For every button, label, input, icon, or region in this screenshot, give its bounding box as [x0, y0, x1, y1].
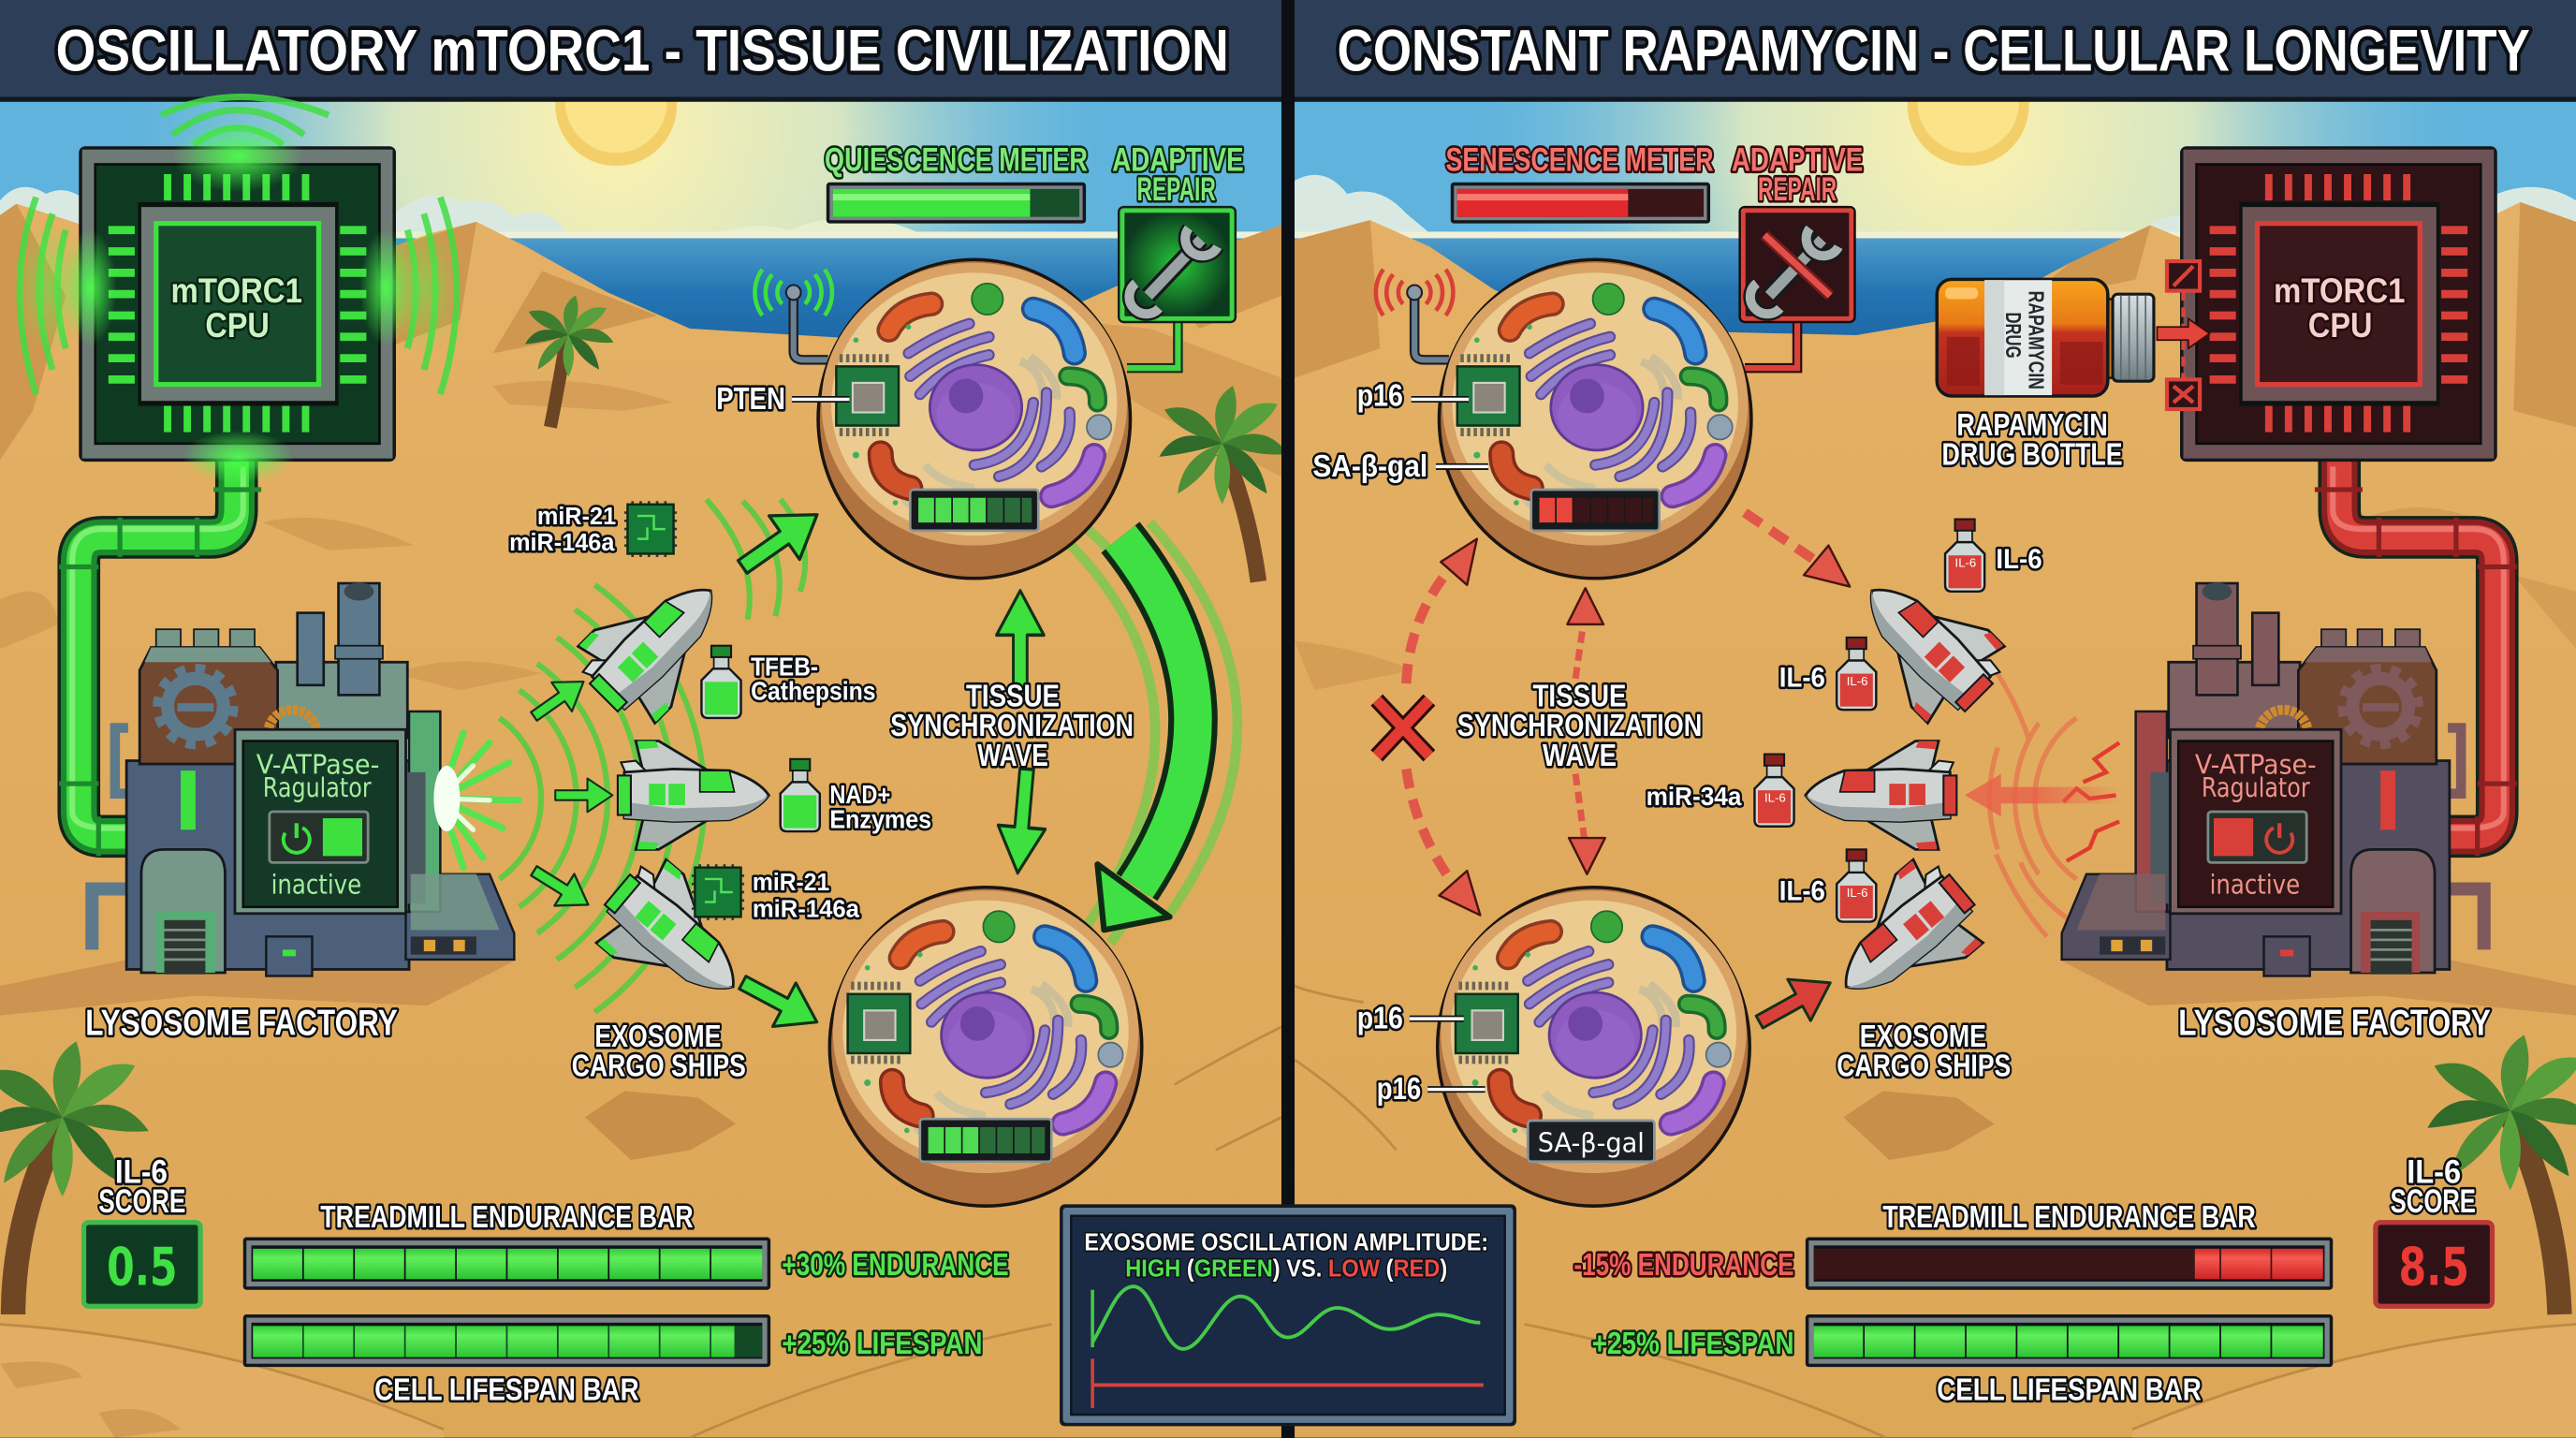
label: tissue synchronization wave right: SYNCHRONIZATION	[1457, 709, 1702, 743]
broken link X mark	[1377, 700, 1429, 756]
lysosome factory: red: Ragulator	[2202, 772, 2310, 803]
callout: SA-beta-gal top: SA-β-gal	[1312, 449, 1427, 484]
callout: p16 top	[1357, 378, 1469, 413]
label: tissue synchronization wave left	[890, 680, 1134, 773]
label: lysosome factory right: LYSOSOME FACTORY	[2178, 1004, 2491, 1044]
vial: IL-6 top: IL-6	[1955, 555, 1976, 569]
label: exosome ships left: EXOSOME	[594, 1020, 721, 1054]
label: exosome ships left	[572, 1020, 746, 1084]
exosome wave arcs: green	[500, 500, 805, 1012]
mTORC1 CPU: red: mTORC1	[2274, 271, 2405, 310]
arrows: green exosome flow	[524, 492, 1050, 1044]
palm tree: left near sea	[1159, 386, 1288, 581]
vial: miR-34a: miR-34a	[1647, 782, 1742, 811]
quiescence meter	[825, 142, 1088, 224]
connector: adaptive repair red	[1745, 318, 1797, 368]
pipe: red	[2315, 460, 2517, 856]
callout: p16 lower one	[1357, 1002, 1464, 1036]
cell: bottom right	[1436, 886, 1751, 1208]
IL-6 score: green: 0.5	[107, 1237, 178, 1298]
exosome wave arcs: red	[1980, 649, 2076, 936]
vial: IL-6 top	[1945, 520, 2042, 592]
vial: TFEB-Cathepsins	[701, 646, 875, 718]
panel: exosome oscillation amplitude	[1060, 1204, 1516, 1426]
bar: cell lifespan left: +25% LIFESPAN	[782, 1327, 983, 1361]
callout: PTEN: PTEN	[716, 382, 785, 417]
mTORC1 CPU: green: mTORC1	[171, 271, 302, 310]
lysosome factory: green	[92, 582, 514, 976]
cell: bottom left	[828, 886, 1144, 1208]
IL-6 score: green	[84, 1154, 200, 1306]
panel: exosome oscillation amplitude: HIGH (GREEN) VS. LOW (RED)	[1125, 1255, 1447, 1283]
mTORC1 CPU: green	[64, 120, 413, 483]
pipe: green	[59, 460, 261, 856]
vial: NAD+ Enzymes	[781, 759, 931, 834]
IL-6 score: green: IL-6	[115, 1154, 168, 1191]
bottle inhibition arrow and blocks	[2157, 261, 2210, 409]
vial: miR-34a: IL-6	[1764, 790, 1786, 804]
palm tree: left mid dune	[525, 296, 614, 427]
senescence meter: SENESCENCE METER	[1445, 142, 1714, 179]
bar: treadmill endurance left: +30% ENDURANCE	[782, 1248, 1009, 1283]
cell: bottom right: SA-β-gal	[1538, 1127, 1645, 1158]
callout: p16 top: p16	[1357, 378, 1403, 413]
panel: exosome oscillation amplitude: EXOSOME OSCILLATION AMPLITUDE:	[1084, 1228, 1488, 1256]
vial: IL-6 third: IL-6	[1847, 886, 1867, 900]
chip cargo: top left: miR-146a	[509, 528, 615, 556]
vial: IL-6 top: IL-6	[1996, 544, 2042, 575]
mTORC1 CPU: red: CPU	[2308, 306, 2372, 345]
palm tree: bottom right	[2427, 1034, 2576, 1314]
signal waves around green CPU	[13, 97, 460, 394]
lysosome factory: green: V-ATPase-	[256, 750, 379, 781]
quiescence meter: QUIESCENCE METER	[825, 142, 1088, 179]
bar: treadmill endurance right	[1573, 1200, 2333, 1290]
connector line bright: red	[1745, 318, 1797, 368]
cell: top right	[1438, 258, 1753, 580]
connector line bright: green	[1127, 318, 1178, 368]
mTORC1 CPU: red	[2180, 146, 2497, 462]
vial: IL-6 third	[1779, 849, 1876, 922]
label: tissue synchronization wave left: WAVE	[977, 739, 1048, 773]
label: tissue synchronization wave right: TISSUE	[1533, 680, 1627, 714]
rapamycin drug bottle: RAPAMYCIN	[2025, 291, 2049, 389]
label: rapamycin drug bottle	[1942, 408, 2123, 473]
vial: NAD+ Enzymes: Enzymes	[829, 805, 931, 834]
rapamycin drug bottle: DRUG	[2001, 312, 2026, 359]
label: tissue synchronization wave right: WAVE	[1543, 739, 1617, 773]
bar: treadmill endurance left: TREADMILL ENDURANCE BAR	[320, 1200, 694, 1235]
lysosome factory: red	[2062, 582, 2484, 976]
label: tissue synchronization wave right	[1457, 680, 1702, 773]
curved synchronization arrow	[1064, 522, 1237, 943]
vial: TFEB-Cathepsins: TFEB-	[751, 652, 818, 681]
background: left desert scene	[0, 44, 1281, 1438]
energy spark	[433, 733, 520, 868]
adaptive repair: green: REPAIR	[1137, 171, 1216, 208]
header bar: left	[0, 0, 1281, 98]
chip cargo: lower left: miR-21	[753, 868, 829, 896]
label: tissue synchronization wave left: TISSUE	[966, 680, 1060, 714]
lysosome factory: red: inactive	[2210, 870, 2300, 901]
antenna: red	[1376, 270, 1453, 360]
ship: middle left	[618, 741, 768, 849]
palm tree: bottom left	[0, 1041, 149, 1314]
label: exosome ships right: CARGO SHIPS	[1837, 1049, 2011, 1084]
ship: top right	[1834, 552, 2017, 736]
connector: adaptive repair green	[1127, 318, 1178, 368]
mTORC1 CPU: green: CPU	[205, 306, 270, 345]
label: tissue synchronization wave left: SYNCHRONIZATION	[890, 709, 1134, 743]
title: left: OSCILLATORY mTORC1 - TISSUE CIVILIZATION	[56, 18, 1229, 83]
IL-6 score: red	[2376, 1154, 2492, 1306]
ship: middle right	[1806, 741, 1956, 849]
IL-6 score: green: SCORE	[98, 1183, 185, 1220]
chip cargo: lower left: miR-146a	[753, 894, 859, 922]
callout: p16 lower one: p16	[1357, 1002, 1403, 1036]
label: exosome ships left: CARGO SHIPS	[572, 1049, 746, 1084]
vial: TFEB-Cathepsins: Cathepsins	[751, 677, 875, 706]
bar: cell lifespan right: +25% LIFESPAN	[1592, 1327, 1794, 1361]
chip cargo: top left	[509, 501, 677, 557]
red electric cracks	[2063, 742, 2119, 861]
bar: cell lifespan left: CELL LIFESPAN BAR	[374, 1372, 639, 1407]
dashed broken arrows: red	[1406, 513, 1850, 916]
label: rapamycin drug bottle: RAPAMYCIN	[1956, 408, 2108, 443]
lysosome factory: green: Ragulator	[263, 772, 372, 803]
adaptive repair: disabled red	[1732, 142, 1863, 322]
antenna: green	[754, 270, 832, 360]
adaptive repair: green: ADAPTIVE	[1112, 142, 1244, 179]
rapamycin drug bottle	[1937, 279, 2154, 396]
arrow: red to exosome ship	[1748, 962, 1841, 1043]
cell: top left	[816, 258, 1132, 580]
bar: treadmill endurance right: -15% ENDURANCE	[1573, 1248, 1794, 1283]
bar: treadmill endurance right: TREADMILL ENDURANCE BAR	[1882, 1200, 2256, 1235]
lysosome factory: green: inactive	[271, 870, 361, 901]
vial: NAD+ Enzymes: NAD+	[829, 780, 890, 809]
callout: p16 lower two	[1377, 1072, 1486, 1107]
adaptive repair: green	[1112, 142, 1244, 322]
vial: IL-6 third: IL-6	[1779, 876, 1825, 907]
adaptive repair: disabled red: REPAIR	[1758, 171, 1837, 208]
lysosome factory: red: V-ATPase-	[2195, 750, 2317, 781]
vial: miR-34a	[1647, 755, 1794, 827]
IL-6 score: red: 8.5	[2398, 1237, 2469, 1298]
bar: cell lifespan right: CELL LIFESPAN BAR	[1937, 1372, 2202, 1407]
chip cargo: lower left	[692, 864, 859, 922]
ship: lower left	[582, 848, 768, 1028]
header bar: right	[1295, 0, 2576, 98]
IL-6 score: red: IL-6	[2407, 1154, 2461, 1191]
label: exosome ships right	[1837, 1020, 2011, 1084]
vial: IL-6 second	[1779, 638, 1876, 710]
bar: cell lifespan right	[1592, 1314, 2333, 1407]
vial: IL-6 second: IL-6	[1779, 663, 1825, 694]
adaptive repair: disabled red: ADAPTIVE	[1732, 142, 1863, 179]
centre divider	[1281, 0, 1295, 1438]
label: exosome ships right: EXOSOME	[1860, 1020, 1986, 1054]
ship: lower right	[1811, 848, 1997, 1028]
chip cargo: top left: miR-21	[537, 502, 616, 530]
vial: IL-6 second: IL-6	[1847, 674, 1867, 688]
bar: cell lifespan left	[243, 1314, 983, 1407]
bar: treadmill endurance left	[243, 1200, 1009, 1290]
amplitude chart	[1092, 1286, 1484, 1408]
header base line	[0, 98, 2576, 101]
label: lysosome factory left: LYSOSOME FACTORY	[85, 1004, 398, 1044]
arrow: faded red from factory	[1965, 774, 2119, 816]
IL-6 score: red: SCORE	[2391, 1183, 2476, 1220]
senescence meter	[1445, 142, 1714, 224]
background: right desert scene	[1295, 44, 2576, 1438]
label: rapamycin drug bottle: DRUG BOTTLE	[1942, 438, 2123, 473]
ship: top left	[565, 552, 749, 736]
callout: p16 lower two: p16	[1377, 1072, 1421, 1107]
